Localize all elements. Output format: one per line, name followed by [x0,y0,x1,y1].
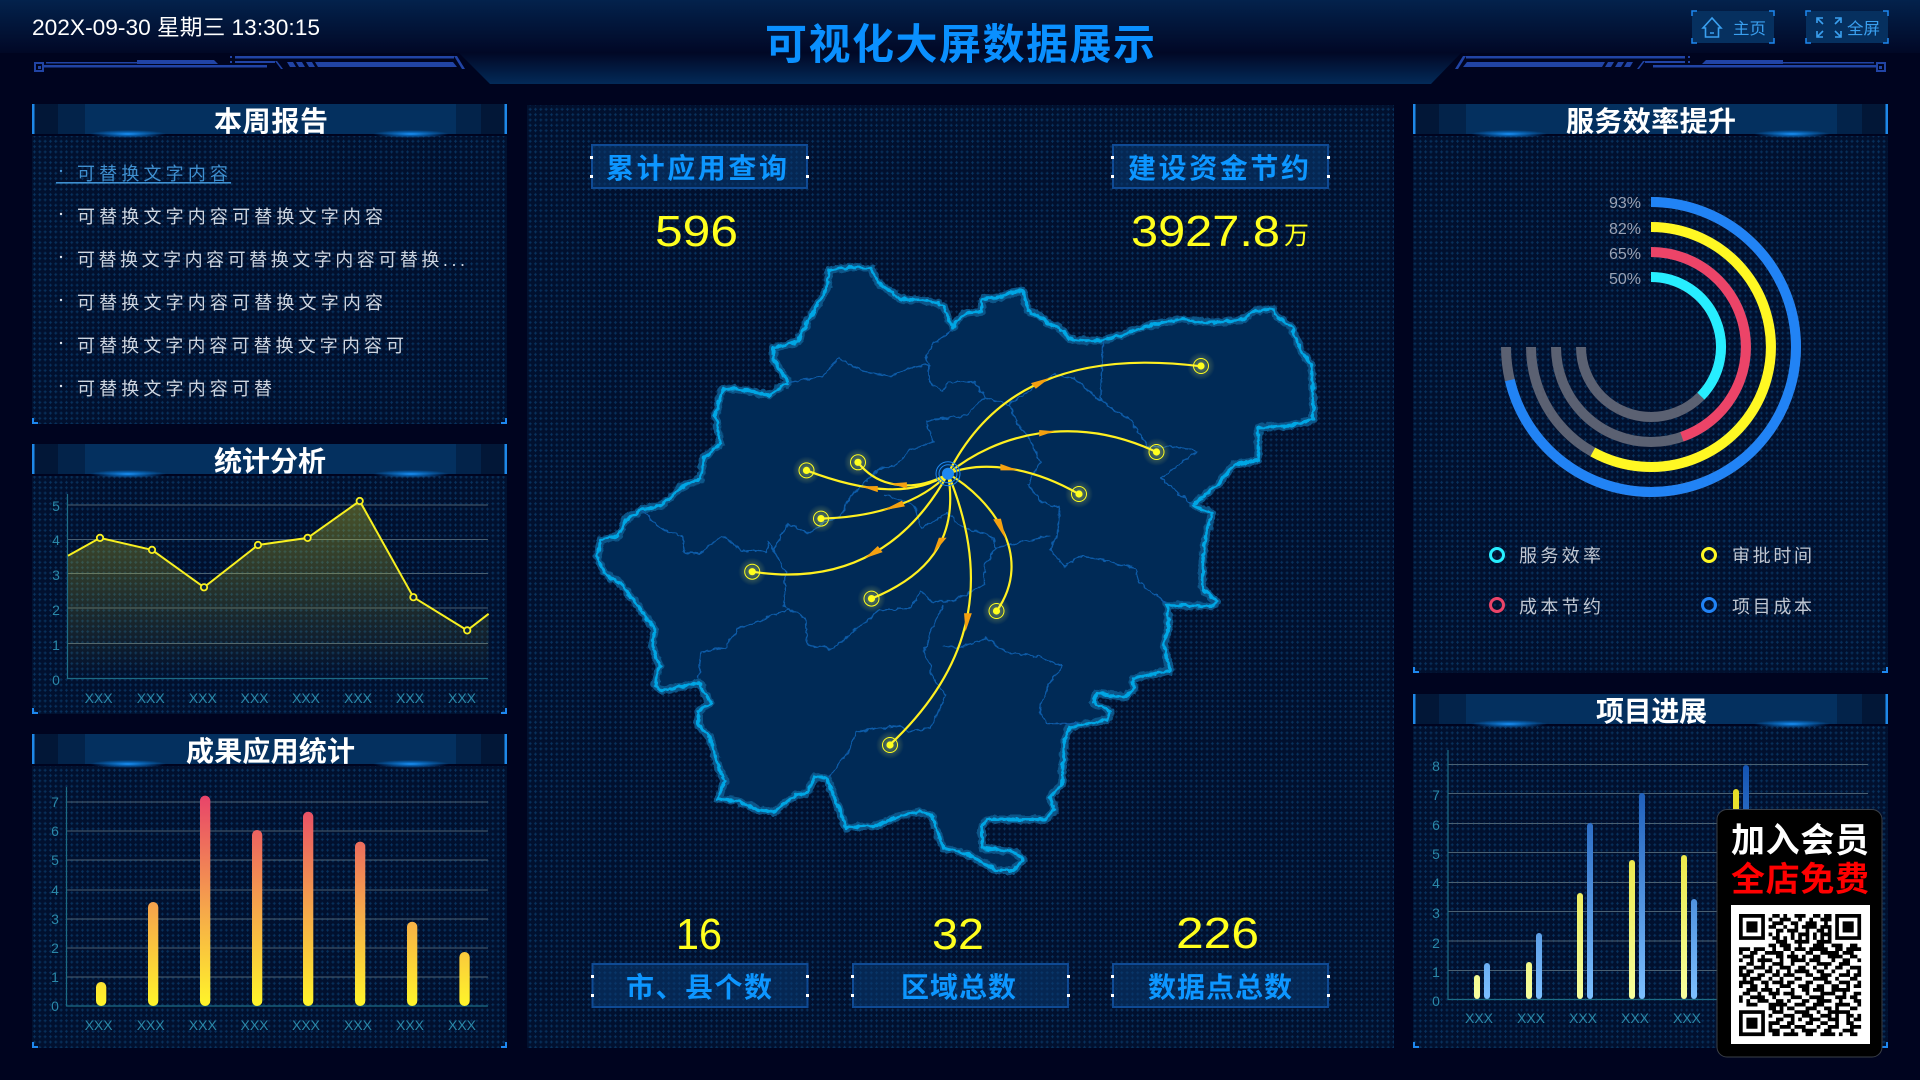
grouped bar chart: XXX [1569,1010,1598,1026]
line chart: XXX [448,690,477,706]
stat: region total [851,910,1070,1007]
stat: region total: 32 [932,910,984,959]
panel: results application statistics [32,734,507,1048]
bar chart: 0 [51,998,59,1014]
ring percentages: 65% [1609,246,1641,263]
grouped bar chart: 8 [1432,758,1440,774]
header band [0,0,1920,84]
bar chart: XXX [137,1017,165,1033]
button: home [1692,11,1774,43]
panel: weekly report [32,104,507,424]
line chart: 3 [52,567,60,583]
map nodes [738,352,1215,759]
ring percentages: 50% [1609,271,1641,288]
line chart [52,494,489,706]
heading: service efficiency: 服务效率提升 [1566,106,1736,137]
legend: 项目成本 [1732,597,1812,617]
QR code [1739,914,1861,1036]
stat: data point total [1111,909,1330,1007]
grouped bar chart [1432,750,1868,1026]
button: fullscreen: 全屏 [1847,20,1880,38]
connector curves and arrowheads [752,363,1201,745]
legend: 成本节约 [1519,597,1601,617]
stat: city and county count: 市、县个数 [626,972,772,1003]
stat: data point total: 数据点总数 [1148,972,1292,1003]
ring chart [1506,202,1796,492]
list of report lines: 可替换文字内容 [77,164,228,184]
bar chart: 1 [51,969,59,985]
bar chart: 5 [51,852,59,868]
bar chart: 7 [51,794,59,810]
stat: funds saved [1111,145,1330,256]
heading: statistical analysis: 统计分析 [214,446,326,477]
header decoration right [1455,56,1885,71]
panel: service efficiency [1413,104,1888,673]
grouped bar chart: XXX [1517,1010,1546,1026]
grouped bar chart: XXX [1465,1010,1494,1026]
grouped bar chart: 0 [1432,993,1440,1009]
ring percentages [1609,195,1641,288]
map hub [936,462,960,486]
bar chart [51,787,488,1033]
promo text: store free: 全店免费 [1731,861,1869,899]
ring percentages: 93% [1609,195,1641,212]
grouped bar chart: XXX [1673,1010,1702,1026]
grouped bar chart: XXX [1621,1010,1650,1026]
heading: results application statistics: 成果应用统计 [186,736,355,767]
grouped bar chart: 2 [1432,935,1440,951]
line chart: XXX [137,690,165,706]
ring percentages: 82% [1609,221,1641,238]
line chart: 5 [52,498,60,514]
heading: project progress: 项目进展 [1596,696,1707,727]
promo card with QR code [1717,810,1882,1057]
stat: cumulative queries [590,145,809,256]
grouped bar chart: 3 [1432,905,1440,921]
page title: 可视化大屏数据展示 [765,21,1155,68]
legend: 审批时间 [1732,546,1812,566]
grouped bar chart: 5 [1432,846,1440,862]
bar chart: XXX [240,1017,269,1033]
header decoration left [35,56,465,71]
bar chart: XXX [292,1017,321,1033]
list of report lines: 可替换文字内容可替换文字内容 [77,293,383,313]
list of report lines: 可替换文字内容可替 [77,379,272,399]
bar chart: 3 [51,911,59,927]
grouped bar chart: 4 [1432,875,1440,891]
list of report lines: 可替换文字内容可替换文字内容可替换... [77,250,465,270]
button: home: 主页 [1733,20,1766,38]
promo text: join membership: 加入会员 [1731,822,1869,860]
panel: centre map [527,105,1394,1048]
list of report lines: 可替换文字内容可替换文字内容可 [77,336,404,356]
stat: funds saved: 万 [1284,222,1309,250]
line chart: 1 [52,637,60,653]
list of report lines: 可替换文字内容可替换文字内容 [77,207,383,227]
bar chart: XXX [448,1017,477,1033]
grouped bar chart: 7 [1432,787,1440,803]
button: fullscreen [1806,11,1888,43]
stat: funds saved: 建设资金节约 [1128,153,1309,184]
legend [1490,546,1812,617]
bar chart: 6 [51,823,59,839]
icon: fullscreen [1817,18,1841,37]
stat: city and county count: 16 [676,910,722,959]
line chart: XXX [396,690,425,706]
stat: funds saved: 3927.8 [1131,207,1280,256]
panel: statistical analysis [32,444,507,714]
bar chart: XXX [85,1017,113,1033]
map [597,267,1313,870]
stat: data point total: 226 [1176,909,1259,958]
bar chart: 4 [51,882,59,898]
map outline and region borders [597,267,1313,870]
bar chart: 2 [51,940,59,956]
panel: project progress [1413,694,1888,1048]
bar chart: XXX [189,1017,217,1033]
bar chart: XXX [344,1017,373,1033]
line chart: XXX [85,690,113,706]
stat: cumulative queries: 596 [655,207,738,256]
stat: region total: 区域总数 [901,972,1016,1003]
heading: weekly report: 本周报告 [214,106,328,137]
line chart: 4 [52,532,60,548]
date and time: 202X-09-30 星期三 13:30:15 [32,15,320,40]
grouped bar chart: 6 [1432,817,1440,833]
legend: 服务效率 [1519,546,1601,566]
icon: home [1703,18,1721,37]
bar chart: XXX [396,1017,425,1033]
list of report lines [56,164,465,399]
line chart: XXX [189,690,217,706]
line chart: XXX [344,690,373,706]
grouped bar chart: 1 [1432,964,1440,980]
line chart: 2 [52,602,60,618]
stat: cumulative queries: 累计应用查询 [606,153,787,184]
line chart: XXX [292,690,321,706]
stat: city and county count [591,910,809,1007]
line chart: 0 [52,672,60,688]
line chart: XXX [240,690,269,706]
